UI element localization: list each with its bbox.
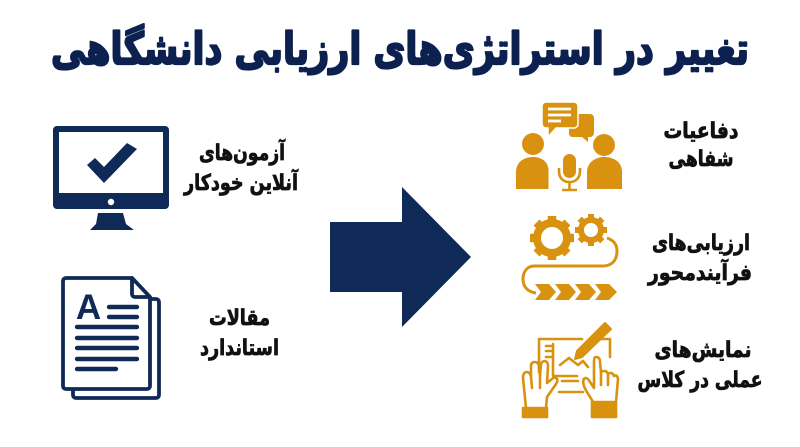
label: standard essays: مقالات xyxy=(209,306,270,331)
icon: monitor with check mark xyxy=(53,126,169,230)
label: oral defenses: دفاعیات xyxy=(664,119,738,144)
label: oral defenses: شفاهی xyxy=(668,147,734,172)
label: online automated exams: آزمون‌های xyxy=(199,138,285,166)
label: online automated exams xyxy=(183,138,298,196)
label: practical classroom demonstrations: عملی در کلاس xyxy=(638,368,762,393)
label: online automated exams: آنلاین خودکار xyxy=(183,168,298,196)
label: process-based assessments xyxy=(647,231,752,286)
icon: stacked documents: A xyxy=(76,288,101,327)
icon: oral defense xyxy=(516,102,622,190)
label: process-based assessments: فرآیندمحور xyxy=(647,258,752,286)
label: standard essays xyxy=(200,306,279,361)
label: practical classroom demonstrations xyxy=(638,338,762,393)
icon: hands presenting on a board xyxy=(523,323,618,417)
arrow: shift from left to right xyxy=(330,187,471,327)
icon: gears and process path xyxy=(523,214,617,300)
label: process-based assessments: ارزیابی‌های xyxy=(652,231,750,256)
label: standard essays: استاندارد xyxy=(200,336,279,361)
label: practical classroom demonstrations: نمایش‌های xyxy=(654,338,752,363)
icon: stacked documents xyxy=(63,278,159,398)
label: oral defenses xyxy=(664,119,738,172)
